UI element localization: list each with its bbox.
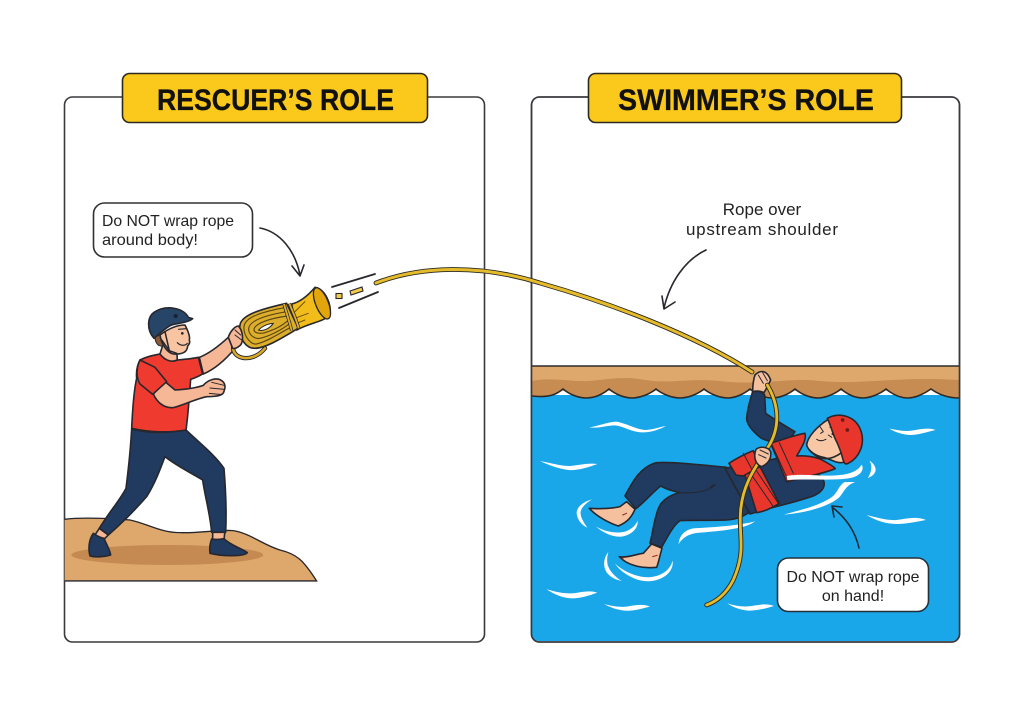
panel: rescuer's role [64, 74, 484, 642]
thrown rope [376, 269, 752, 372]
label: rope over upstream shoulder: upstream shoulder [686, 220, 838, 239]
heading: swimmer's role: SWIMMER’S ROLE [618, 84, 874, 117]
coil [240, 303, 299, 348]
head [149, 308, 193, 361]
callout: do not wrap rope on hand [778, 558, 928, 612]
throwing hand [228, 326, 243, 349]
callout: do not wrap rope on hand: on hand! [822, 588, 884, 605]
label: rope over upstream shoulder [686, 200, 838, 239]
rope bag [292, 286, 334, 330]
arrow: to rope bag [260, 228, 304, 276]
surface foam [787, 465, 863, 480]
water ripples [540, 422, 936, 611]
wetsuit legs [625, 462, 753, 547]
hand on rope [755, 447, 771, 467]
head [807, 415, 862, 464]
front arm [137, 360, 225, 408]
lower rope [707, 385, 777, 605]
shirt [132, 354, 203, 432]
throwing arm [199, 337, 235, 374]
callout: do not wrap rope around body: around body! [102, 232, 198, 249]
torso and vest [725, 433, 835, 514]
heading: rescuer's role [122, 74, 428, 122]
heading: swimmer's role [588, 74, 902, 122]
shoes and ankles [89, 528, 247, 557]
rope coil and bag [228, 286, 334, 358]
rescuer figure [89, 308, 247, 557]
trousers [99, 429, 226, 535]
thigh crease [680, 485, 715, 493]
panel: swimmer's role [532, 74, 960, 642]
label: rope over upstream shoulder: Rope over [723, 200, 802, 219]
callout: do not wrap rope around body: Do NOT wrap rope [102, 213, 234, 230]
swimmer figure [589, 372, 863, 605]
ground: rock ledge [65, 518, 317, 581]
arrow: to hand [832, 506, 859, 548]
water [532, 395, 959, 641]
river bank [532, 366, 959, 398]
raised arm [747, 372, 795, 443]
arrow: to shoulder rope [662, 250, 706, 309]
hanging loop [233, 343, 265, 358]
motion lines [332, 274, 378, 308]
callout: do not wrap rope around body [94, 203, 252, 257]
heading: rescuer's role: RESCUER’S ROLE [157, 84, 394, 117]
callout: do not wrap rope on hand: Do NOT wrap rope [786, 569, 920, 586]
feet [589, 502, 662, 568]
